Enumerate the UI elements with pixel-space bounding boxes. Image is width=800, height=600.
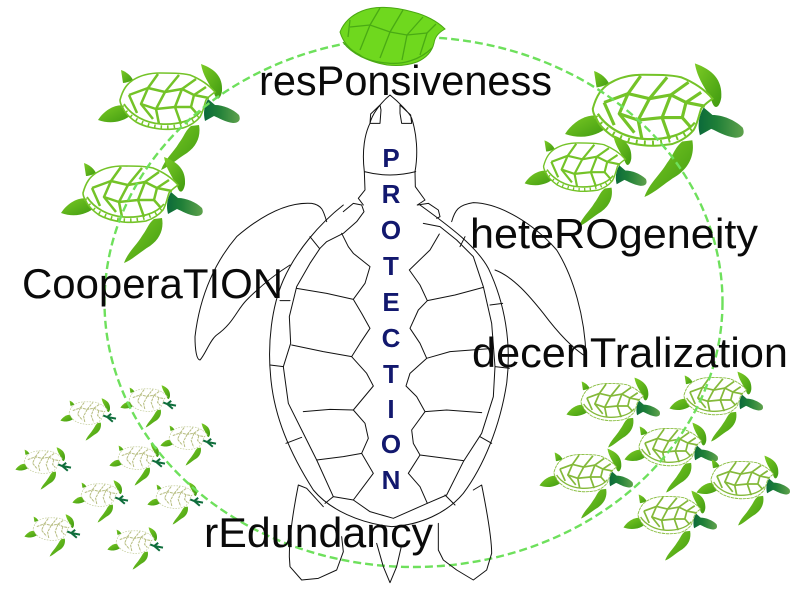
vertical word: PROTECTION: O	[381, 429, 401, 459]
icon: green turtle shell (top)	[340, 7, 445, 66]
turtle shell inner edge	[283, 203, 495, 503]
vertical word: PROTECTION: N	[382, 465, 400, 495]
dashed green circle	[104, 37, 722, 567]
vertical word: PROTECTION: T	[383, 251, 399, 281]
vertical word: PROTECTION	[381, 143, 401, 495]
turtle rear flippers and tail	[289, 485, 492, 583]
vertical word: PROTECTION: E	[382, 287, 400, 317]
vertical word: PROTECTION: R	[382, 179, 401, 209]
turtle front flippers	[195, 203, 586, 360]
label: redundancy: rEdundancy	[204, 509, 433, 556]
turtle shell outer edge	[270, 205, 508, 527]
vertical word: PROTECTION: C	[382, 323, 401, 353]
turtle shell scutes	[270, 233, 509, 518]
vertical word: PROTECTION: T	[383, 359, 399, 389]
label: heterogeneity: heteROgeneity	[470, 210, 758, 257]
label: cooperation: CooperaTION	[22, 260, 283, 307]
label: responsiveness: resPonsiveness	[259, 57, 552, 104]
heterogeneity turtles (top right)	[525, 63, 744, 226]
outline sea turtle (centre)	[195, 95, 586, 583]
cooperation turtles (top left)	[61, 64, 240, 263]
label: decentralization: decenTralization	[472, 329, 788, 376]
turtle head and neck	[358, 95, 425, 205]
vertical word: PROTECTION: O	[381, 215, 401, 245]
vertical word: PROTECTION: I	[387, 394, 395, 424]
vertical word: PROTECTION: P	[382, 143, 400, 173]
decentralization turtles (bottom right)	[539, 372, 790, 561]
redundancy turtles (bottom left)	[15, 385, 216, 570]
